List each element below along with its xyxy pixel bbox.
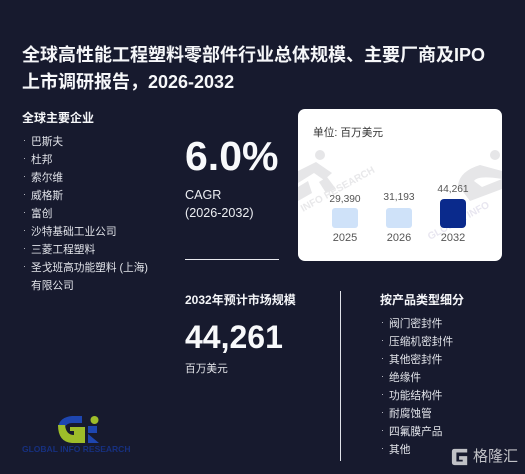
segment list: 其他 xyxy=(389,444,410,456)
bar: 2025 xyxy=(329,194,361,244)
watermark xyxy=(298,150,502,243)
company list: 三菱工程塑料 xyxy=(31,244,95,256)
company list: 沙特基础工业公司 xyxy=(31,226,117,238)
heading: global companies: 全球主要企业 xyxy=(22,111,94,125)
company list: 圣戈班高功能塑料 (上海) xyxy=(31,262,148,274)
logo text: GLOBAL INFO RESEARCH xyxy=(22,444,130,454)
logo mark xyxy=(452,448,468,466)
bar: 2032 xyxy=(437,184,469,244)
panel: global companies xyxy=(22,111,148,292)
company list xyxy=(24,136,148,292)
heading: product segments: 按产品类型细分 xyxy=(380,293,464,307)
value 2025: 29,390 xyxy=(329,194,361,205)
company list: 富创 xyxy=(31,208,52,220)
CAGR label: CAGR xyxy=(185,188,221,202)
panel: product segments xyxy=(380,293,464,456)
panel: 2032 market size xyxy=(185,293,296,375)
title: 上市调研报告，2026-2032 xyxy=(22,72,234,92)
year 2032: 2032 xyxy=(441,232,465,244)
unit label: 单位: 百万美元 xyxy=(313,127,383,139)
segment list: 四氟膜产品 xyxy=(389,426,442,438)
company list: 巴斯夫 xyxy=(31,136,63,148)
title: 全球高性能工程塑料零部件行业总体规模、主要厂商及IPO xyxy=(22,45,485,65)
title xyxy=(22,45,485,92)
logo: Global Info Research xyxy=(22,416,130,454)
bar: 2026 xyxy=(383,192,415,244)
company list: 威格斯 xyxy=(31,190,63,202)
CAGR label: (2026-2032) xyxy=(185,206,254,220)
heading: market size: 2032年预计市场规模 xyxy=(185,293,296,307)
segment list xyxy=(382,318,453,456)
segment list: 功能结构件 xyxy=(389,390,442,402)
market size unit: 百万美元 xyxy=(185,363,228,375)
company list: 有限公司 xyxy=(31,280,74,292)
panel: bar chart card xyxy=(298,109,502,261)
CAGR value: 6.0% xyxy=(185,133,278,179)
market size value: 44,261 xyxy=(185,319,283,355)
segment list: 阀门密封件 xyxy=(389,318,442,330)
watermark: INFO RESEARCH xyxy=(299,165,377,215)
year 2026: 2026 xyxy=(387,232,411,244)
segment list: 压缩机密封件 xyxy=(389,336,453,348)
bar 2025 xyxy=(332,208,358,228)
segment list: 绝缘件 xyxy=(389,372,421,384)
CAGR label xyxy=(185,188,254,220)
bar 2032 xyxy=(440,199,466,228)
company list: 杜邦 xyxy=(31,154,52,166)
logo text: 格隆汇 xyxy=(473,448,518,465)
value 2026: 31,193 xyxy=(383,192,415,203)
watermark: GLOBAL INFO xyxy=(426,200,492,243)
company list: 索尔维 xyxy=(31,172,63,184)
segment list: 耐腐蚀管 xyxy=(389,408,432,420)
year 2025: 2025 xyxy=(333,232,357,244)
logo: Gelonghui xyxy=(452,448,518,466)
logo mark xyxy=(58,416,99,443)
bar 2026 xyxy=(386,208,412,228)
value 2032: 44,261 xyxy=(437,184,469,195)
segment list: 其他密封件 xyxy=(389,354,442,366)
